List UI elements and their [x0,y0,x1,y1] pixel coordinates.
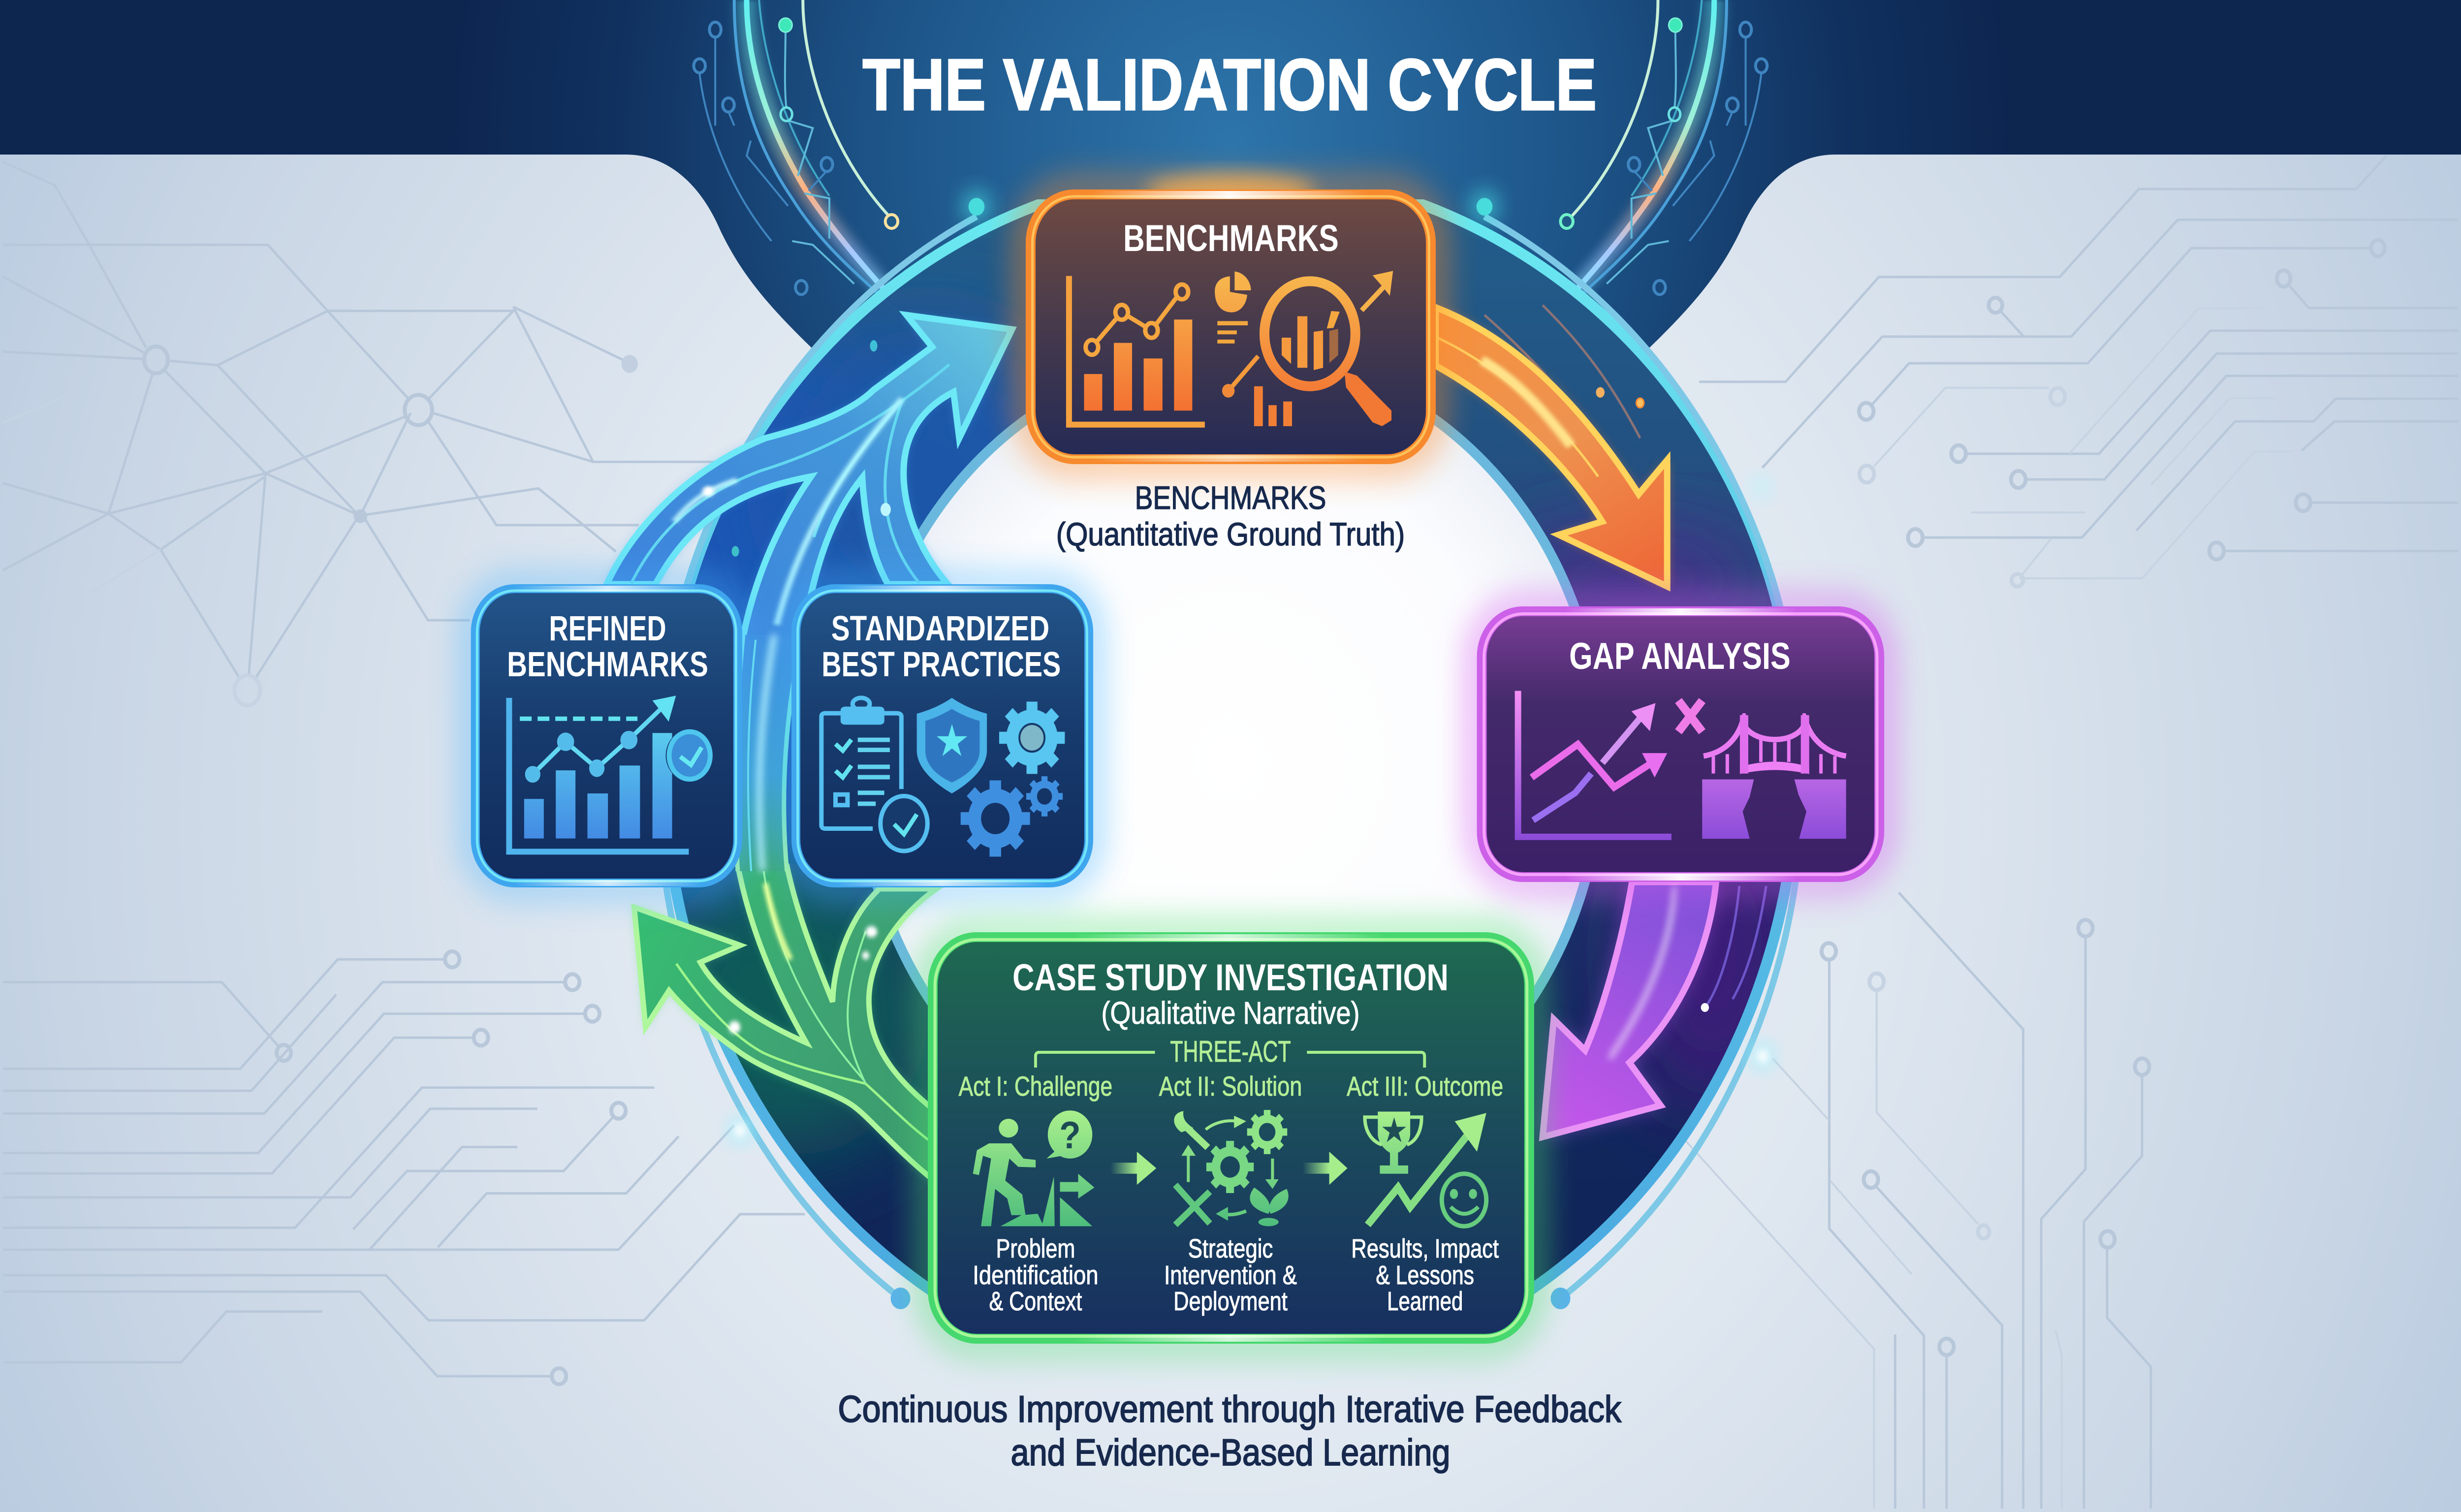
arrow: orange, benchmarks to gap analysis [1436,307,1667,586]
arrow: act II to act III [1303,1152,1348,1185]
heading: case study investigation: CASE STUDY INVESTIGATION [1012,957,1449,999]
act II: solution [1159,1071,1302,1316]
act III: outcome: & Lessons [1376,1260,1474,1290]
icon: person climbing with question: ? [1059,1114,1081,1157]
act III: outcome: Act III: Outcome [1347,1071,1503,1102]
act III: outcome: Results, Impact [1351,1233,1499,1263]
panel: refined benchmarks [472,585,741,886]
arrow: purple, gap analysis to case study [1543,882,1766,1137]
cycle ring [670,199,1792,1295]
arrow: act I to act II [1110,1152,1156,1185]
act II: solution: Intervention & [1164,1260,1297,1290]
panel: case study investigation [929,933,1533,1343]
heading: gap analysis: GAP ANALYSIS [1569,635,1791,677]
heading: case study investigation [1012,957,1449,1031]
act II: solution: Act II: Solution [1159,1071,1302,1102]
caption: benchmarks: (Quantitative Ground Truth) [1056,516,1405,553]
act I: challenge [959,1071,1112,1316]
act II: solution: Strategic [1188,1233,1273,1263]
icon: gap chart and broken bridge [1518,691,1846,839]
icon: benchmark charts and magnifier [1069,271,1393,426]
arc end node: left [885,215,898,228]
heading: standardized best practices: BEST PRACTICES [821,645,1061,684]
act I: challenge: Identification [973,1260,1099,1290]
act III: outcome [1347,1071,1503,1316]
act I: challenge: Act I: Challenge [959,1071,1112,1102]
arrow: green, case study feedback streams [634,866,937,1183]
arc nodes [728,189,1774,1309]
heading: refined benchmarks: REFINED [549,609,666,648]
heading: case study investigation: (Qualitative Narrative) [1101,995,1360,1031]
arrow: central stream linking green and blue between the boxes [735,635,803,871]
inner white circle [859,352,1602,1169]
title: THE VALIDATION CYCLE [862,44,1597,125]
footer statement [838,1388,1622,1474]
footer statement: and Evidence-Based Learning [1011,1432,1450,1474]
label: three-act bracket: THREE-ACT [1170,1036,1291,1069]
arrow: blue, refined benchmarks and best practices return to benchmarks [607,315,1012,640]
act I: challenge: Problem [996,1233,1075,1263]
panel: benchmarks [1027,174,1434,463]
neon circuit arcs: header left [694,0,900,306]
thin outer arc: right [1484,217,1802,1298]
act I: challenge: & Context [989,1286,1082,1316]
icon: rising chart with check badge [509,695,714,851]
icon: clipboard, shield and gears [821,698,1065,857]
heading: standardized best practices: STANDARDIZED [831,609,1049,648]
act II: solution: Deployment [1173,1286,1288,1316]
heading: standardized best practices [821,609,1061,684]
heading: refined benchmarks: BENCHMARKS [507,645,708,684]
arc end node: right [1560,215,1573,228]
heading: refined benchmarks [507,609,708,684]
icon: trophy, growth arrow and smile [1365,1111,1486,1226]
footer statement: Continuous Improvement through Iterative Feedback [838,1388,1622,1430]
icon: tools, gears and plant [1174,1110,1289,1226]
heading: benchmarks: BENCHMARKS [1123,218,1339,259]
label: three-act bracket [1036,1036,1424,1069]
caption: benchmarks [1056,480,1405,553]
panel: gap analysis [1478,607,1883,881]
panel: standardized best practices [793,585,1092,886]
caption: benchmarks: BENCHMARKS [1135,480,1326,516]
icon: person climbing with question [973,1110,1094,1226]
thin outer arc: left [659,217,977,1298]
neon circuit arcs: header right [1561,0,1767,306]
act III: outcome: Learned [1387,1286,1463,1316]
